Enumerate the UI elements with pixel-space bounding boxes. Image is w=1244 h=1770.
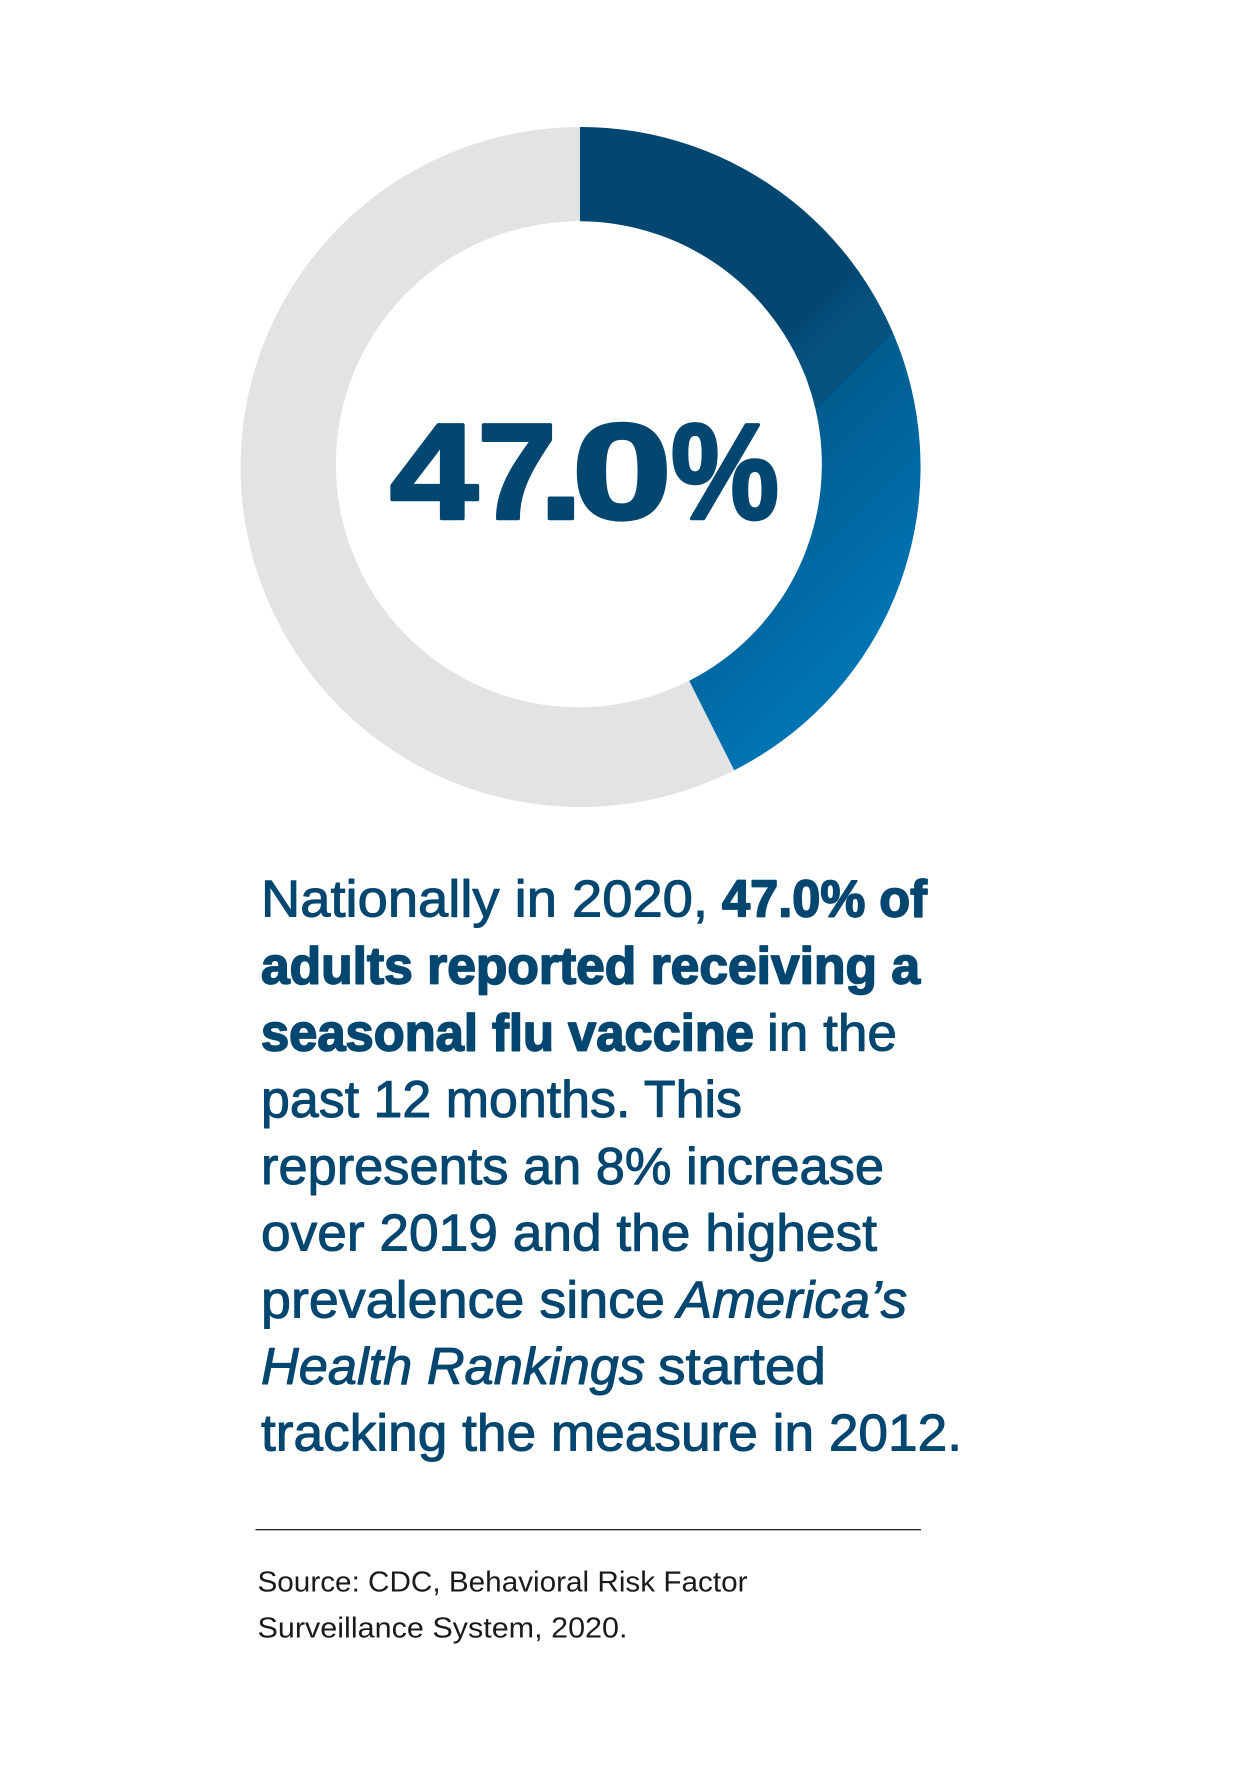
donut center value: 0	[572, 396, 672, 548]
donut center value: .	[539, 396, 583, 548]
donut center value: 7	[478, 396, 556, 548]
body paragraph: tracking the measure in 2012.	[261, 1405, 962, 1463]
donut center value: 4	[390, 396, 478, 548]
body paragraph: seasonal flu vaccine	[261, 1004, 754, 1062]
body paragraph: Nationally in 2020,	[261, 871, 708, 929]
body paragraph: started	[658, 1338, 826, 1396]
donut chart	[241, 127, 921, 807]
body paragraph: 47.0% of	[722, 871, 928, 929]
body paragraph: in the	[767, 1004, 897, 1062]
source note: Surveillance System, 2020.	[258, 1613, 628, 1645]
body paragraph: represents an 8% increase	[261, 1138, 884, 1196]
source note: Source: CDC, Behavioral Risk Factor	[258, 1567, 748, 1599]
source note	[258, 1567, 748, 1645]
donut center value: %	[671, 396, 779, 548]
body paragraph: adults reported receiving a	[261, 938, 921, 996]
body paragraph: Health Rankings	[261, 1338, 645, 1396]
body paragraph: America’s	[674, 1272, 907, 1330]
donut center value	[390, 396, 779, 548]
donut remainder segment	[241, 127, 734, 807]
body paragraph: prevalence since	[261, 1272, 665, 1330]
body paragraph: over 2019 and the highest	[261, 1205, 878, 1263]
donut highlighted segment	[580, 127, 921, 770]
body paragraph: past 12 months. This	[261, 1071, 742, 1129]
body paragraph	[261, 871, 962, 1463]
